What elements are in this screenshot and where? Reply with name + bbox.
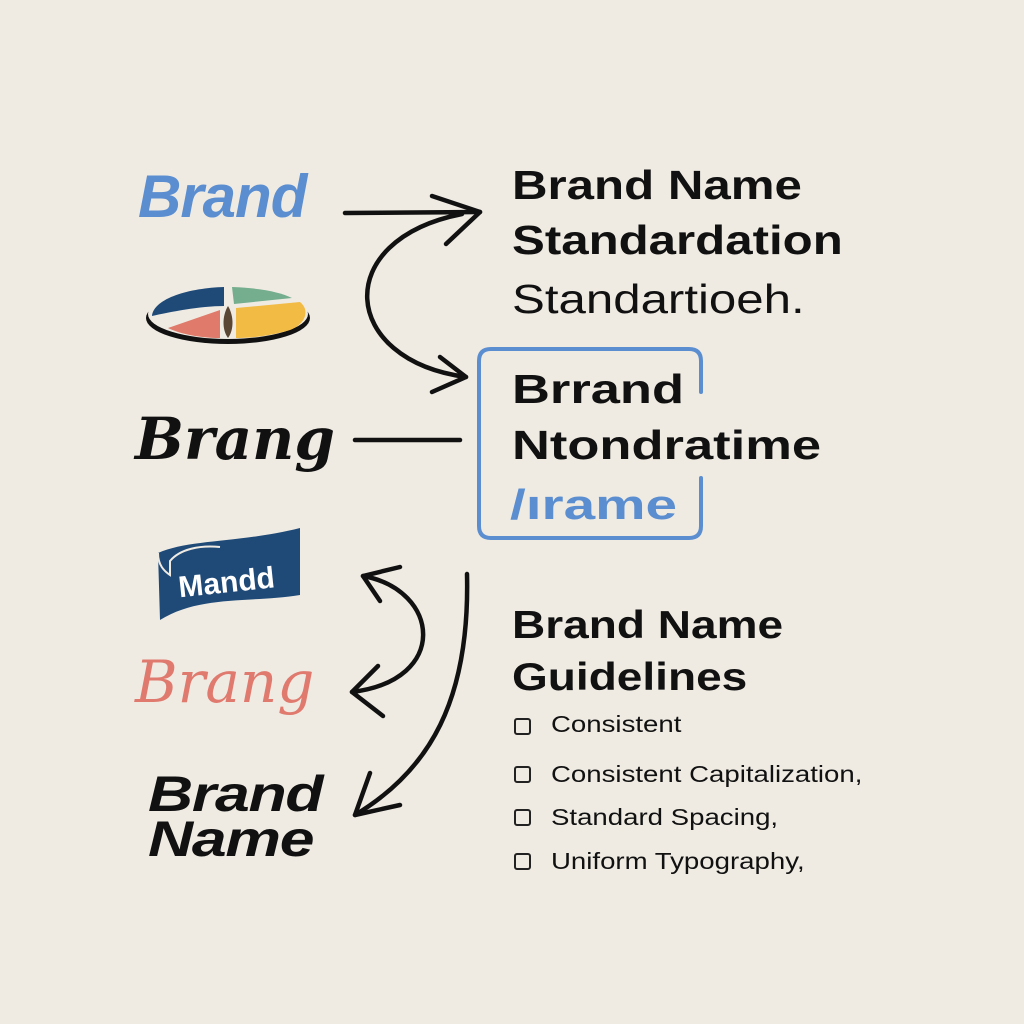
logo: pie emblem	[146, 287, 310, 344]
logo: Mandd banner: Mandd	[177, 561, 276, 604]
heading: Brand Name Standardation: Standardation	[512, 217, 843, 263]
logo: black script Brand: Brang	[135, 405, 335, 473]
heading: guidelines: Brand Name	[512, 604, 783, 647]
logo: pink script Brand: Brang	[135, 648, 314, 716]
checklist: Standard Spacing,	[551, 804, 778, 830]
heading: Brand Name Standardation	[512, 162, 843, 263]
checklist: Consistent Capitalization,	[551, 761, 862, 787]
logo: blue italic Brand: Brand	[138, 163, 306, 230]
checklist: Uniform Typography,	[551, 848, 805, 874]
logo: bold Brand Name	[148, 766, 325, 867]
heading: guidelines	[512, 604, 783, 699]
box text: Ntondratime	[512, 422, 821, 468]
logo: bold Brand Name: Name	[148, 811, 313, 867]
framed box	[477, 347, 821, 540]
arrow: double curve	[352, 567, 423, 716]
heading: guidelines: Guidelines	[512, 656, 747, 699]
connector line	[355, 438, 460, 442]
checklist	[514, 711, 862, 874]
heading: Brand Name Standardation: Brand Name	[512, 162, 802, 208]
arrow: s-curve to box	[367, 214, 466, 392]
checklist: Consistent	[551, 711, 681, 737]
box blue word: /ırame	[510, 481, 677, 528]
logo: Mandd banner	[158, 528, 300, 620]
subtitle: Standartioeh.	[512, 276, 805, 322]
arrow: top right	[345, 196, 480, 244]
logo: bold Brand Name: Brand	[148, 766, 322, 822]
arrow: long curve	[355, 574, 467, 815]
box text: Brrand	[512, 366, 684, 412]
box text	[512, 366, 821, 468]
